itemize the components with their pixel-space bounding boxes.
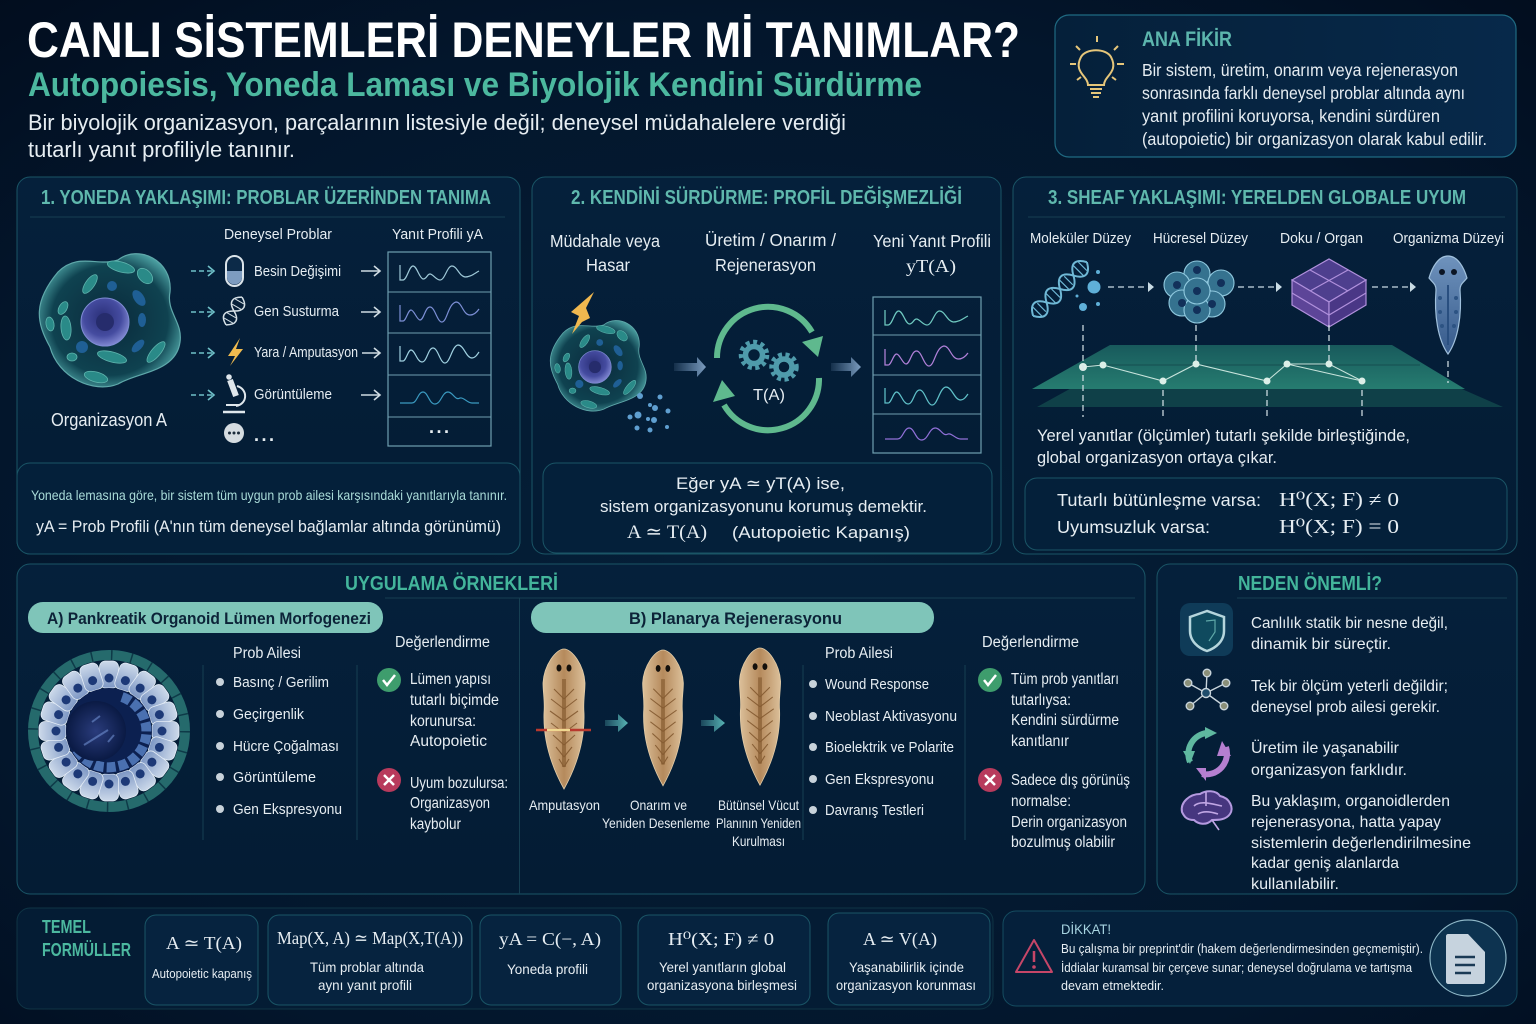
illustration: tissue block [1292,259,1366,327]
intro text: tutarlı yanıt profiliyle tanınır. [28,137,295,162]
sheet: global layer [1032,345,1503,407]
list B: prob ailesi: Davranış Testleri [825,802,924,819]
formula card 3: yA = C(−, A) [499,929,601,950]
text: item 4: kullanılabilir. [1251,876,1339,893]
profile table [388,252,491,446]
example B header: B) Planarya Rejenerasyonu [629,609,842,628]
text: item 3: organizasyon farklıdır. [1251,762,1407,779]
evaluation A: Organizasyon [410,795,490,812]
icon: more dots [224,423,244,443]
evaluation B: tutarlıysa: [1011,692,1071,709]
text: item 4: kadar geniş alanlarda [1251,855,1399,872]
stage labels: Onarım ve [630,797,687,813]
panel: dikkat [1003,911,1517,1006]
text: item 2: deneysel prob ailesi gerekir. [1251,699,1440,716]
formula card 1 [145,915,258,1005]
formula card 5: A ≃ V(A) [863,929,937,950]
list A: prob ailesi: Geçirgenlik [233,706,304,723]
text: İddialar kuramsal bir çerçeve sunar; deneysel doğrulama ve tartışma [1061,961,1412,975]
intro text: Bir biyolojik organizasyon, parçalarının listesiyle değil; deneysel müdahalelere verdiği [28,110,846,135]
icon: DNA [220,294,248,328]
formula card 5: organizasyon korunması [836,977,976,993]
text: item 4 [1251,793,1471,893]
heading: 1. YONEDA YAKLAŞIMI: PROBLAR ÜZERİNDEN TANIMA [41,186,491,209]
heading: 2. KENDİNİ SÜRDÜRME: PROFİL DEĞİŞMEZLİĞİ [571,185,962,209]
heading: DİKKAT! [1061,920,1111,937]
text: item 3: Üretim ile yaşanabilir [1251,739,1400,757]
panel 1: yoneda yaklaşımı [17,177,520,554]
icon: lightning bolt [228,338,243,366]
level labels: Organizma Düzeyi [1393,231,1504,247]
probe labels: Besin Değişimi [254,263,341,280]
text: item 2 [1251,678,1448,716]
probe labels: Görüntüleme [254,386,332,403]
panel: neden önemli [1157,564,1517,894]
evaluation A: Değerlendirme [395,634,490,651]
panel: ana fikir [1055,15,1516,157]
formula card 4: Yerel yanıtların global [659,959,786,975]
text: item 1 [1251,615,1448,653]
formula card 1: Autopoietic kapanış [152,966,252,981]
formula card 4 [638,915,810,1005]
stage labels [529,797,801,849]
evaluation B [978,634,1130,851]
illustration: damaged cell [550,292,670,432]
text: ana fikir: (autopoietic) bir organizasyon olarak kabul edilir. [1142,129,1487,149]
example B header [531,602,934,633]
heading: FORMÜLLER [42,940,131,960]
stage labels: Yeniden Desenleme [602,815,710,831]
probe labels: Yara / Amputasyon [254,344,358,361]
icon: microscope [223,375,245,412]
evaluation B: normalse: [1011,793,1071,810]
arrow [674,357,706,377]
text: Bu çalışma bir preprint'dir (hakem değerlendirmesinden geçmemiştir). [1061,942,1423,956]
heading: 3. SHEAF YAKLAŞIMI: YERELDEN GLOBALE UYUM [1048,187,1466,209]
box: yoneda statement: yA = Prob Profili (A'nın tüm deneysel bağlamlar altında görünümü) [36,517,501,536]
text: item 4: sistemlerin değerlendirilmesine [1251,835,1471,852]
evaluation A [377,634,508,833]
box: cohomology: Uyumsuzluk varsa: [1057,517,1210,537]
icon: shield [1180,603,1233,656]
heading: UYGULAMA ÖRNEKLERİ [345,572,558,595]
heading: ana fikir: ANA FİKİR [1142,28,1232,51]
stage labels: Planının Yeniden [716,815,801,831]
evaluation B: Tüm prob yanıtları [1011,671,1119,688]
list B: prob ailesi: Wound Response [825,676,929,693]
column labels: Üretim / Onarım / [705,230,836,250]
icon: cycle arrows [1183,727,1231,781]
illustration: planaria stages [536,648,781,789]
list A: prob ailesi: Görüntüleme [233,769,316,786]
formula card 4: H⁰(X; F) ≠ 0 [668,929,774,950]
icon: cross [377,768,401,792]
icon: network [1184,669,1230,710]
evaluation A: kaybolur [410,816,461,833]
box: closure statement: Eğer yA ≃ yT(A) ise, [676,474,845,493]
probe labels: ... [254,425,274,445]
level labels: Moleküler Düzey [1030,231,1132,247]
text: devam etmektedir. [1061,979,1164,993]
illustration: cell cluster [1164,261,1234,323]
formula card 5: Yaşanabilirlik içinde [849,959,964,975]
column labels [550,230,991,277]
probe labels: Gen Susturma [254,303,340,320]
formula card 5 [828,913,990,1005]
column labels: yT(A) [906,256,956,277]
list B: prob ailesi: Prob Ailesi [825,645,893,662]
illustration: DNA [1027,256,1100,322]
text: item 3 [1251,739,1407,779]
list A: prob ailesi: Gen Ekspresyonu [233,801,342,818]
column heading: profile: Yanıt Profili yA [392,226,483,243]
heading: TEMEL [42,917,91,937]
formula card 4: organizasyona birleşmesi [647,977,797,993]
list A: prob ailesi: Basınç / Gerilim [233,674,329,691]
text: ana fikir: sonrasında farklı deneysel problar altında aynı [1142,83,1465,103]
text: item 1: Canlılık statik bir nesne değil, [1251,615,1448,632]
cell illustration [39,254,180,387]
box: cohomology [1025,478,1507,550]
box: cohomology: H⁰(X; F) = 0 [1279,516,1399,538]
text [1061,942,1423,993]
panel 3: sheaf yaklaşımı [1013,177,1517,554]
evaluation A: Lümen yapısı [410,671,491,688]
box: yoneda statement: Yoneda lemasına göre, bir sistem tüm uygun prob ailesi karşısındaki yanıtlarıyla tanınır. [31,487,507,503]
formula card 1: A ≃ T(A) [166,933,242,954]
example A header: A) Pankreatik Organoid Lümen Morfogenezi [47,609,371,628]
panel: temel formüller [17,908,993,1009]
panel: uygulama örnekleri [17,564,1145,894]
icon: warning triangle [1016,940,1052,972]
example A header [28,602,383,633]
cycle: T(A) [713,307,823,430]
icon: light bulb [1070,36,1124,97]
text: item 2: Tek bir ölçüm yeterli değildir; [1251,678,1448,695]
box: yoneda statement [17,463,520,554]
stage labels: Kurulması [732,833,785,849]
text: local to global: Yerel yanıtlar (ölçümler) tutarlı şekilde birleştiğinde, [1037,426,1410,445]
arrows: dashed [1108,282,1416,292]
illustration: organism [1429,256,1467,354]
icon: cross [978,768,1002,792]
box: closure statement: (Autopoietic Kapanış) [732,523,910,542]
icon: brain [1182,791,1232,830]
text: local to global [1037,426,1410,467]
evaluation B: kanıtlanır [1011,733,1069,750]
text: item 1: dinamik bir süreçtir. [1251,636,1391,653]
level labels: Hücresel Düzey [1153,231,1249,247]
evaluation B: bozulmuş olabilir [1011,834,1115,851]
intro text [28,110,846,162]
text: local to global: global organizasyon ortaya çıkar. [1037,448,1277,467]
list B: prob ailesi [809,645,957,819]
box: closure statement [543,463,992,553]
formula card 3: Yoneda profili [507,961,588,977]
profile table [873,297,981,453]
column labels: Müdahale veya [550,231,660,251]
evaluation A: tutarlı biçimde [410,692,499,709]
icon: document [1430,920,1506,996]
formula card 2: Map(X, A) ≃ Map(X,T(A)) [277,928,463,949]
text: ana fikir: Bir sistem, üretim, onarım veya rejenerasyon [1142,60,1458,80]
icon: capsule [226,256,243,286]
formula card 2 [268,915,472,1005]
formula card 3 [480,915,621,1005]
formula card 2: Tüm problar altında [310,959,424,975]
illustration: organoid [33,655,185,807]
arrows: to profile [361,266,380,400]
column labels: Hasar [586,255,630,275]
level labels [1030,231,1504,247]
evaluation A: Autopoietic [410,733,487,750]
box: cohomology: Tutarlı bütünleşme varsa: [1057,490,1261,510]
title: CANLI SİSTEMLERİ DENEYLER Mİ TANIMLAR? [27,12,1020,68]
arrows: dashed input [191,266,214,400]
stage labels: Bütünsel Vücut [718,797,799,813]
cycle: T(A): T(A) [753,387,785,404]
list A: prob ailesi: Hücre Çoğalması [233,738,339,755]
box: closure statement: sistem organizasyonunu korumuş demektir. [600,497,927,516]
stage labels: Amputasyon [529,797,600,813]
list B: prob ailesi: Gen Ekspresyonu [825,771,934,788]
text: ana fikir [1142,60,1487,149]
evaluation B: Kendini sürdürme [1011,712,1119,729]
profile table: ... [429,417,449,437]
arrow [831,357,861,377]
text: item 4: rejenerasyona, hatta yapay [1251,814,1441,831]
evaluation A: korunursa: [410,713,476,730]
heading [42,917,131,960]
level labels: Doku / Organ [1280,231,1363,247]
list B: prob ailesi: Neoblast Aktivasyonu [825,708,957,725]
box: cohomology: H⁰(X; F) ≠ 0 [1279,489,1399,511]
list A: prob ailesi [216,645,342,818]
column heading: probes: Deneysel Problar [224,226,332,243]
evaluation B: Derin organizasyon [1011,814,1127,831]
evaluation B: Değerlendirme [982,634,1079,651]
column labels: Yeni Yanıt Profili [873,231,991,251]
icon: check [978,668,1002,692]
column labels: Rejenerasyon [715,255,816,275]
panel 2: kendini sürdürme [532,177,1001,554]
text: item 4: Bu yaklaşım, organoidlerden [1251,793,1450,810]
graph: local responses [1079,325,1448,417]
label: organizasyon A: Organizasyon A [51,410,167,430]
list A: prob ailesi: Prob Ailesi [233,645,301,662]
evaluation B: Sadece dış görünüş [1011,772,1130,789]
icon: check [377,668,401,692]
heading: NEDEN ÖNEMLİ? [1238,572,1382,595]
subtitle: Autopoiesis, Yoneda Laması ve Biyolojik Kendini Sürdürme [28,66,922,104]
text: ana fikir: yanıt profilini koruyorsa, kendini sürdüren [1142,106,1440,126]
box: closure statement: A ≃ T(A) [627,522,707,543]
formula card 2: aynı yanıt profili [318,977,412,993]
list B: prob ailesi: Bioelektrik ve Polarite [825,739,954,756]
evaluation A: Uyum bozulursa: [410,775,508,792]
probe labels [254,263,358,445]
